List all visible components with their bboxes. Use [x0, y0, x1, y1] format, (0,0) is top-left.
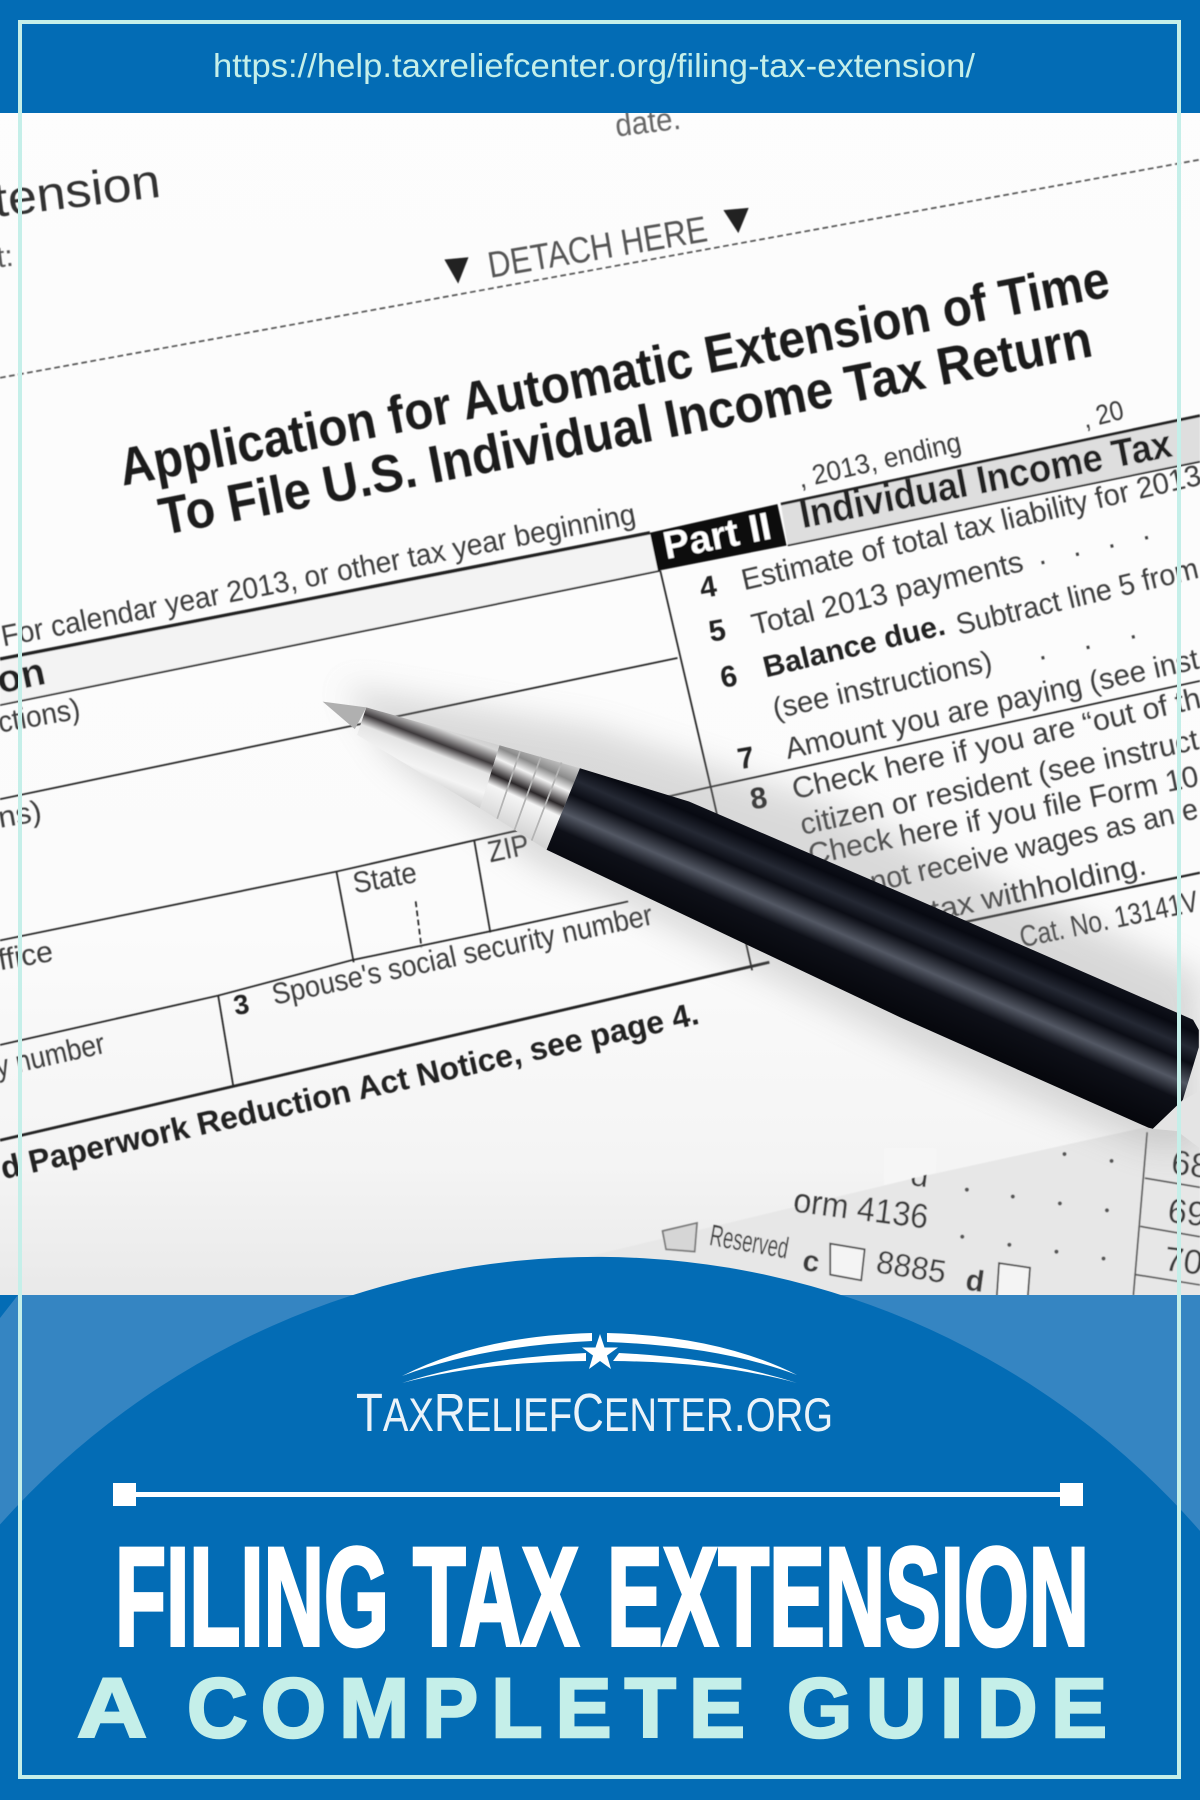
form lines and text: Part II [660, 505, 775, 568]
pen silver cone [357, 707, 500, 808]
subtitle: A Complete Guide: COMPLETE [187, 1661, 745, 1755]
form lines and text: (see instructions) [769, 645, 995, 726]
second tax form sheet: d [909, 1156, 931, 1194]
form lines and text: 3 [231, 988, 252, 1021]
form lines and text: Amount you are paying (see inst [782, 643, 1200, 766]
second tax form sheet: 8885 [874, 1244, 949, 1290]
form lines and text: 5 [706, 613, 728, 649]
photo: tax form with pen [0, 0, 1200, 1299]
pen shadow [344, 687, 1200, 1148]
blue arch panel [0, 1257, 1200, 1800]
second tax form sheet [661, 1128, 1200, 1295]
url text: https://help.taxreliefcenter.org/filing-tax-extension/ [213, 47, 976, 84]
second tax form sheet: c [801, 1244, 822, 1279]
form lines and text: . . . . [1033, 513, 1153, 572]
pen black barrel [547, 768, 1199, 1129]
form lines and text: To File U.S. Individual Income Tax Return [154, 310, 1097, 547]
form lines and text: date. [613, 100, 682, 144]
pen [323, 702, 1200, 1148]
form lines and text: Check here if you file Form 10 [806, 760, 1200, 872]
form lines and text: tax withholding. [928, 848, 1149, 928]
form lines and text: . . . [1033, 612, 1139, 667]
divider with end caps [113, 1483, 1083, 1506]
form lines and text: 8 [748, 781, 770, 816]
form lines and text: Application for Automatic Extension of Time [114, 250, 1114, 498]
form lines and text: , 2013, ending [795, 426, 964, 494]
logo wordmark: TAXRELIEFCENTER.ORG [356, 1383, 833, 1443]
form lines and text: citizen or resident (see instruct [797, 723, 1200, 842]
logo: Tax Relief Center [356, 1333, 833, 1443]
form lines and text: Check here if you are “out of th [789, 682, 1200, 806]
title: Filing Tax Extension: TAX [413, 1518, 579, 1675]
form lines and text: Individual Income Tax [796, 423, 1175, 537]
subtitle: A Complete Guide: GUIDE [787, 1661, 1107, 1755]
subtitle: A Complete Guide [77, 1661, 1107, 1755]
logo star and swooshes [402, 1333, 797, 1383]
form lines and text: Total 2013 payments [748, 545, 1026, 642]
title: Filing Tax Extension [115, 1518, 1089, 1675]
form lines and text: Spouse's social security number [269, 899, 656, 1012]
form lines and text: 7 [735, 741, 757, 776]
second tax form sheet: Reserved [707, 1219, 791, 1265]
second tax form sheet: d [964, 1264, 986, 1299]
lower light band [0, 1295, 1200, 1800]
form lines and text: Estimate of total tax liability for 2013 [738, 459, 1200, 597]
second tax form sheet: orm 4136 [791, 1182, 931, 1237]
pen collar rings [480, 745, 580, 850]
subtitle: A Complete Guide: A [77, 1661, 147, 1755]
title: Filing Tax Extension: FILING [115, 1518, 389, 1675]
pen tip [323, 702, 366, 729]
form lines and text: d Paperwork Reduction Act Notice, see page 4. [0, 995, 702, 1186]
left corner wedge [0, 1295, 18, 1318]
form lines and text [0, 100, 1200, 1186]
form lines and text: State [350, 856, 419, 900]
form lines and text: , 20 [1079, 394, 1127, 434]
form lines and text: For calendar year 2013, or other tax year beginning [0, 498, 638, 653]
form lines and text: DETACH HERE [485, 208, 710, 286]
form lines and text: 6 [718, 659, 740, 695]
form lines and text: Balance due. [760, 609, 948, 684]
top url bar [0, 0, 1200, 113]
pen silver end [1153, 1098, 1200, 1142]
form lines and text: 4 [697, 570, 720, 605]
form lines and text: ZIP [485, 828, 532, 869]
